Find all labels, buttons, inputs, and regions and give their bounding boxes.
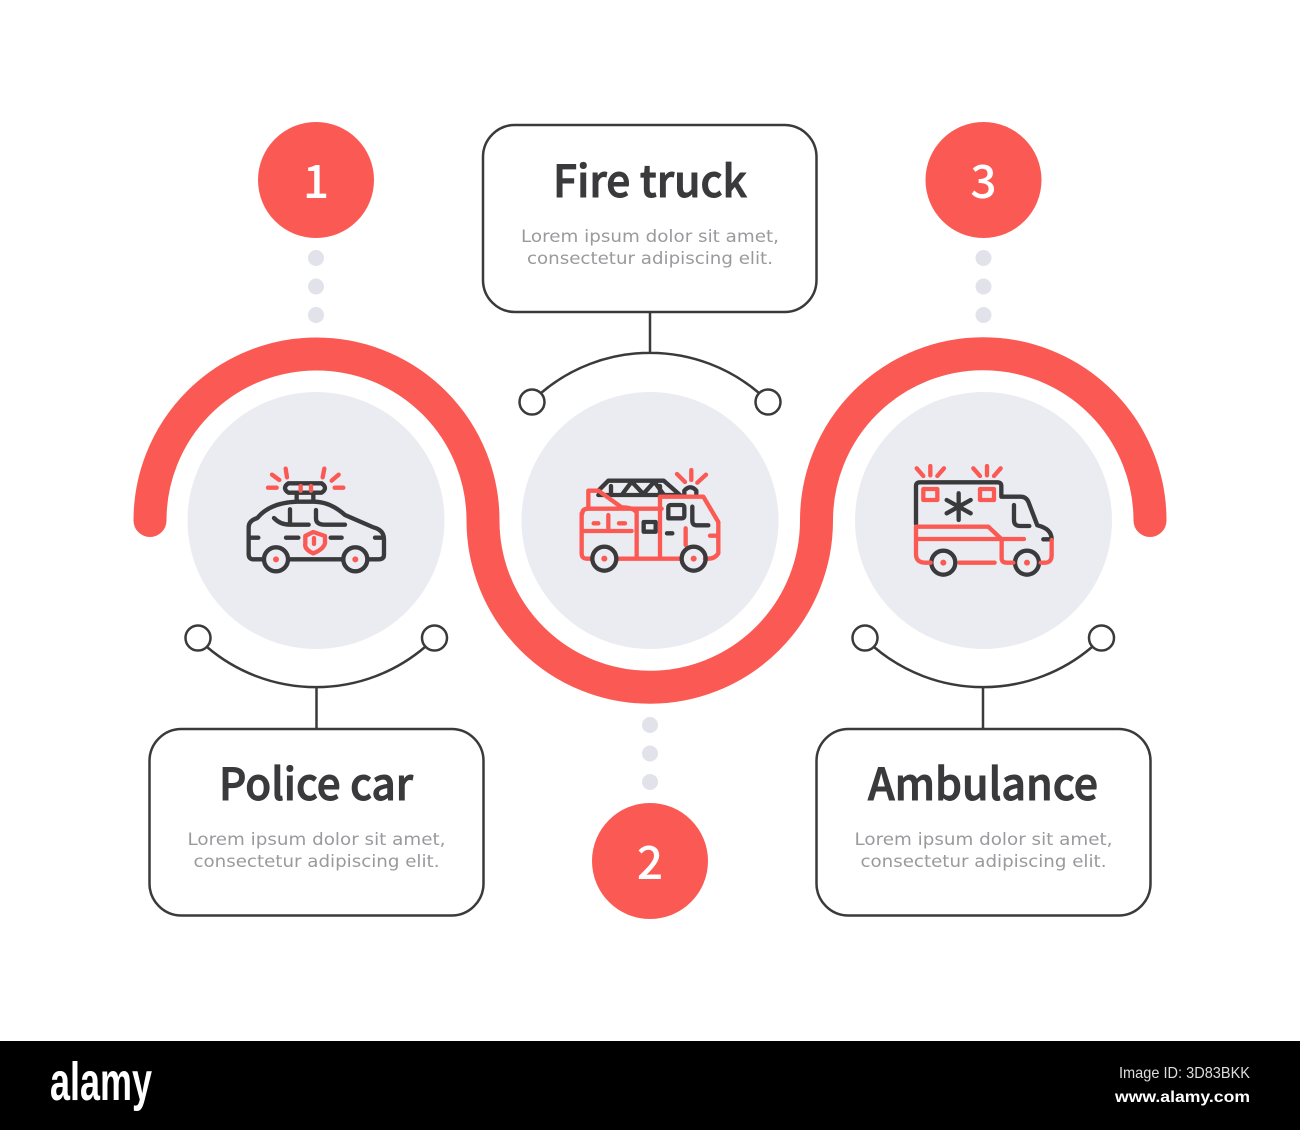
text box: police car: [150, 729, 484, 916]
text box: fire truck: consectetur adipiscing elit.: [527, 249, 773, 269]
text box: ambulance: Lorem ipsum dolor sit amet,: [854, 830, 1112, 850]
grey circle: fire truck: [522, 392, 778, 649]
panel: fire truck: [483, 125, 816, 919]
panel: ambulance: [816, 122, 1150, 916]
icon: police car: [249, 469, 384, 571]
text box: fire truck: Lorem ipsum dolor sit amet,: [521, 227, 779, 247]
dotted connector 2: [642, 717, 658, 790]
logo: alamy: alamy: [50, 1052, 152, 1112]
image id: Image ID: 3D83BKK: [1119, 1065, 1250, 1082]
number badge 2: 2: [637, 827, 663, 893]
number badge 1: [258, 122, 374, 238]
watermark footer bar: [0, 1041, 1300, 1130]
connector arc: police car: [186, 626, 447, 729]
panel: police car: [150, 122, 484, 916]
grey circle: ambulance: [855, 392, 1112, 649]
connector arc: fire truck: [520, 312, 780, 414]
text box: ambulance: Ambulance: [868, 749, 1098, 813]
icon: fire truck: [582, 470, 718, 571]
text box: police car: Police car: [219, 749, 414, 813]
text box: police car: Lorem ipsum dolor sit amet,: [188, 830, 446, 850]
red winding ribbon: [150, 354, 1150, 687]
text box: ambulance: consectetur adipiscing elit.: [860, 852, 1106, 872]
number badge 3: [926, 122, 1042, 238]
text box: fire truck: [483, 125, 816, 312]
text box: fire truck: Fire truck: [553, 146, 747, 210]
number badge 1: 1: [303, 146, 329, 212]
dotted connector 1: [308, 250, 324, 323]
grey circle: police car: [188, 392, 444, 649]
number badge 2: [592, 803, 708, 919]
dotted connector 3: [976, 250, 992, 323]
number badge 3: 3: [970, 146, 997, 212]
connector arc: ambulance: [852, 626, 1114, 729]
icon: ambulance: [916, 466, 1052, 575]
text box: ambulance: [816, 729, 1150, 916]
website: www.alamy.com: [1114, 1089, 1250, 1106]
text box: police car: consectetur adipiscing elit.: [194, 852, 440, 872]
